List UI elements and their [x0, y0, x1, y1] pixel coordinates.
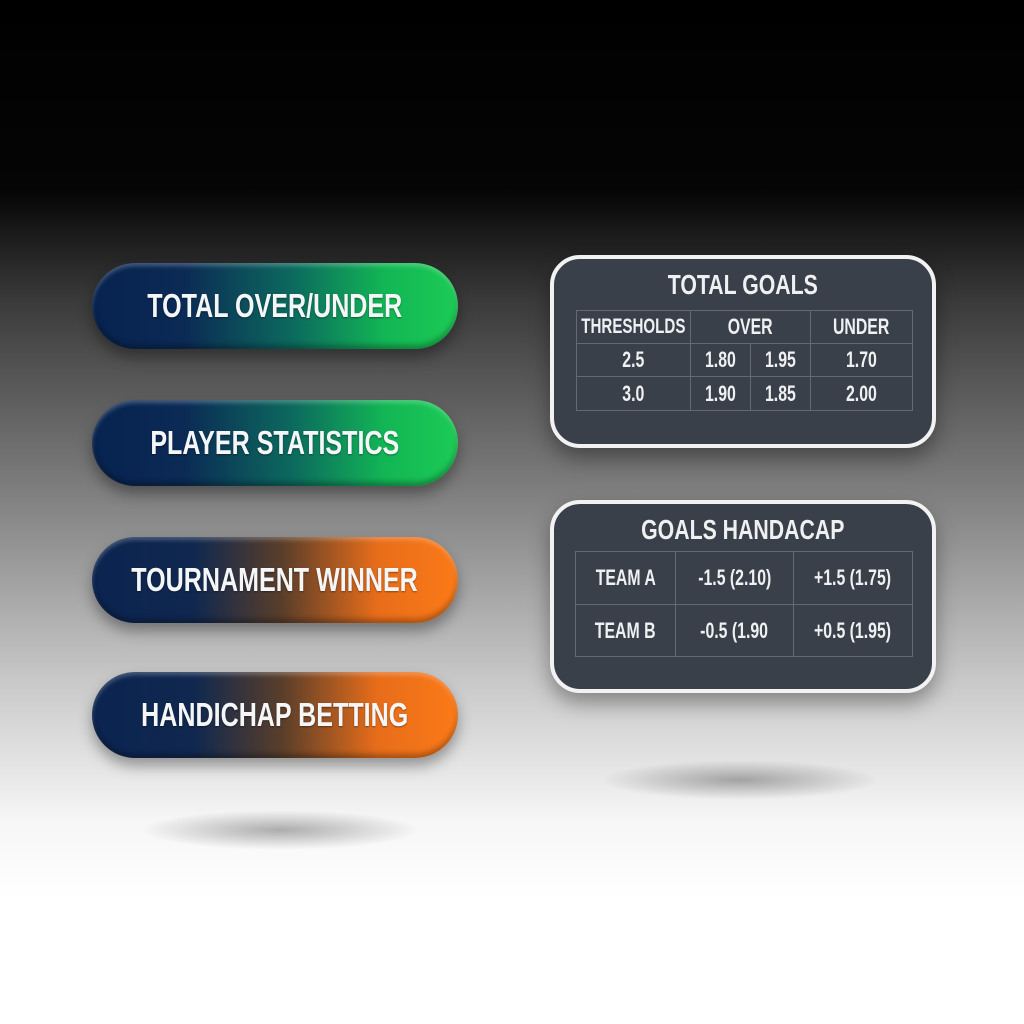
- shadow under panels: [600, 760, 880, 800]
- table: total goals: UNDER: [833, 314, 890, 339]
- table: total goals: OVER: [728, 314, 773, 339]
- table: goals handicap: TEAM A: [595, 565, 656, 590]
- pill: player statistics: [92, 400, 458, 486]
- table: total goals: 1.85: [765, 380, 796, 406]
- table: goals handicap: -0.5 (1.90: [701, 618, 768, 642]
- pill: tournament winner: [92, 537, 458, 623]
- pill: handichap betting: [92, 672, 458, 758]
- pill: player statistics: PLAYER STATISTICS: [151, 424, 399, 461]
- table: total goals: THRESHOLDS: [581, 315, 686, 338]
- table: total goals: 1.90: [705, 380, 736, 406]
- table: goals handicap: [575, 551, 913, 657]
- table: total goals: 3.0: [622, 380, 645, 406]
- pill: tournament winner: TOURNAMENT WINNER: [132, 561, 418, 598]
- table: total goals: 1.80: [705, 347, 736, 372]
- table: total goals: 1.70: [846, 347, 877, 372]
- heading: total goals: TOTAL GOALS: [668, 269, 818, 300]
- table: goals handicap: TEAM B: [595, 618, 656, 642]
- table: total goals: 1.95: [765, 347, 796, 372]
- panel: total goals: [550, 255, 936, 448]
- table: total goals: 2.5: [622, 347, 645, 372]
- pill: total over/under: [92, 263, 458, 349]
- pill: handichap betting: HANDICHAP BETTING: [141, 696, 409, 733]
- heading: goals handacap: GOALS HANDACAP: [641, 514, 845, 545]
- table: total goals: [576, 310, 913, 411]
- shadow under pills: [140, 810, 420, 850]
- table: goals handicap: +1.5 (1.75): [814, 565, 892, 590]
- table: goals handicap: -1.5 (2.10): [698, 565, 771, 590]
- pill: total over/under: TOTAL OVER/UNDER: [147, 287, 403, 324]
- table: goals handicap: +0.5 (1.95): [814, 618, 892, 642]
- panel: goals handacap: [550, 500, 936, 693]
- table: total goals: 2.00: [846, 380, 877, 406]
